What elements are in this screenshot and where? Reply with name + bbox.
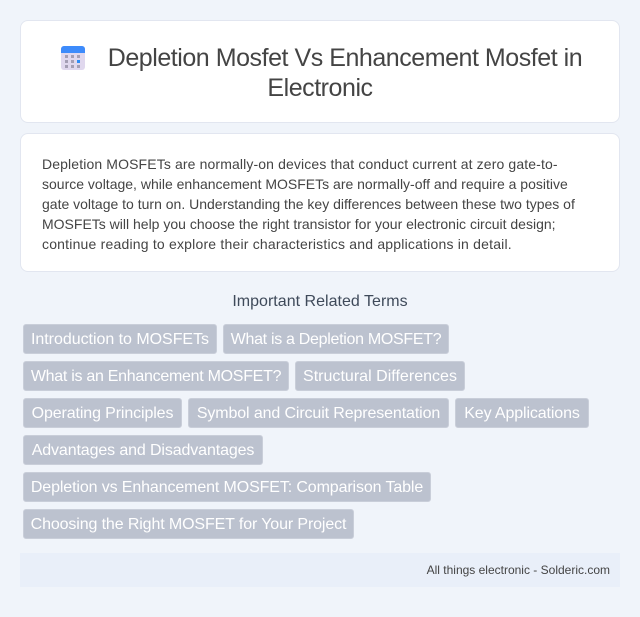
chip: operating: Operating Principles xyxy=(32,405,173,422)
chip: operating xyxy=(23,398,182,428)
intro paragraph: MOSFETs will help you choose the right transistor for your electronic circuit design; xyxy=(42,216,556,232)
chip: choosing: Choosing the Right MOSFET for Your Project xyxy=(31,516,346,533)
intro paragraph: source voltage, while enhancement MOSFETs are normally-off and require a positive xyxy=(42,176,568,192)
title: Electronic xyxy=(267,74,373,102)
chip: structural xyxy=(295,361,465,391)
chip: comparison xyxy=(23,472,431,502)
intro paragraph xyxy=(42,156,575,252)
intro paragraph: gate voltage to turn on. Understanding the key differences between these two types of xyxy=(42,196,575,212)
icon: calendar grid xyxy=(61,46,85,70)
related terms heading: Important Related Terms xyxy=(232,293,408,310)
chip: depletion xyxy=(223,324,449,354)
intro paragraph: continue reading to explore their characteristics and applications in detail. xyxy=(42,236,512,252)
chip: introduction xyxy=(23,324,217,354)
chip: applications xyxy=(455,398,589,428)
footer credit: All things electronic - Solderic.com xyxy=(427,563,610,577)
title xyxy=(108,44,582,102)
chip: applications: Key Applications xyxy=(464,405,580,422)
chip: comparison: Depletion vs Enhancement MOSFET: Comparison Table xyxy=(31,479,423,496)
chip: enhancement xyxy=(23,361,289,391)
chip: advantages: Advantages and Disadvantages xyxy=(32,442,254,459)
chip: symbol: Symbol and Circuit Representation xyxy=(197,405,440,422)
chip: choosing xyxy=(23,509,354,539)
related terms chips xyxy=(23,324,589,539)
chip: enhancement: What is an Enhancement MOSFET? xyxy=(31,368,281,385)
chip: symbol xyxy=(188,398,449,428)
chip: depletion: What is a Depletion MOSFET? xyxy=(231,331,441,348)
intro text card xyxy=(20,133,620,272)
header card xyxy=(20,20,620,123)
chip: advantages xyxy=(23,435,263,465)
footer bar xyxy=(20,553,620,587)
chip: introduction: Introduction to MOSFETs xyxy=(31,331,209,348)
chip: structural: Structural Differences xyxy=(303,368,457,385)
title: Depletion Mosfet Vs Enhancement Mosfet in xyxy=(108,44,582,72)
intro paragraph: Depletion MOSFETs are normally-on devices that conduct current at zero gate-to- xyxy=(42,156,558,172)
